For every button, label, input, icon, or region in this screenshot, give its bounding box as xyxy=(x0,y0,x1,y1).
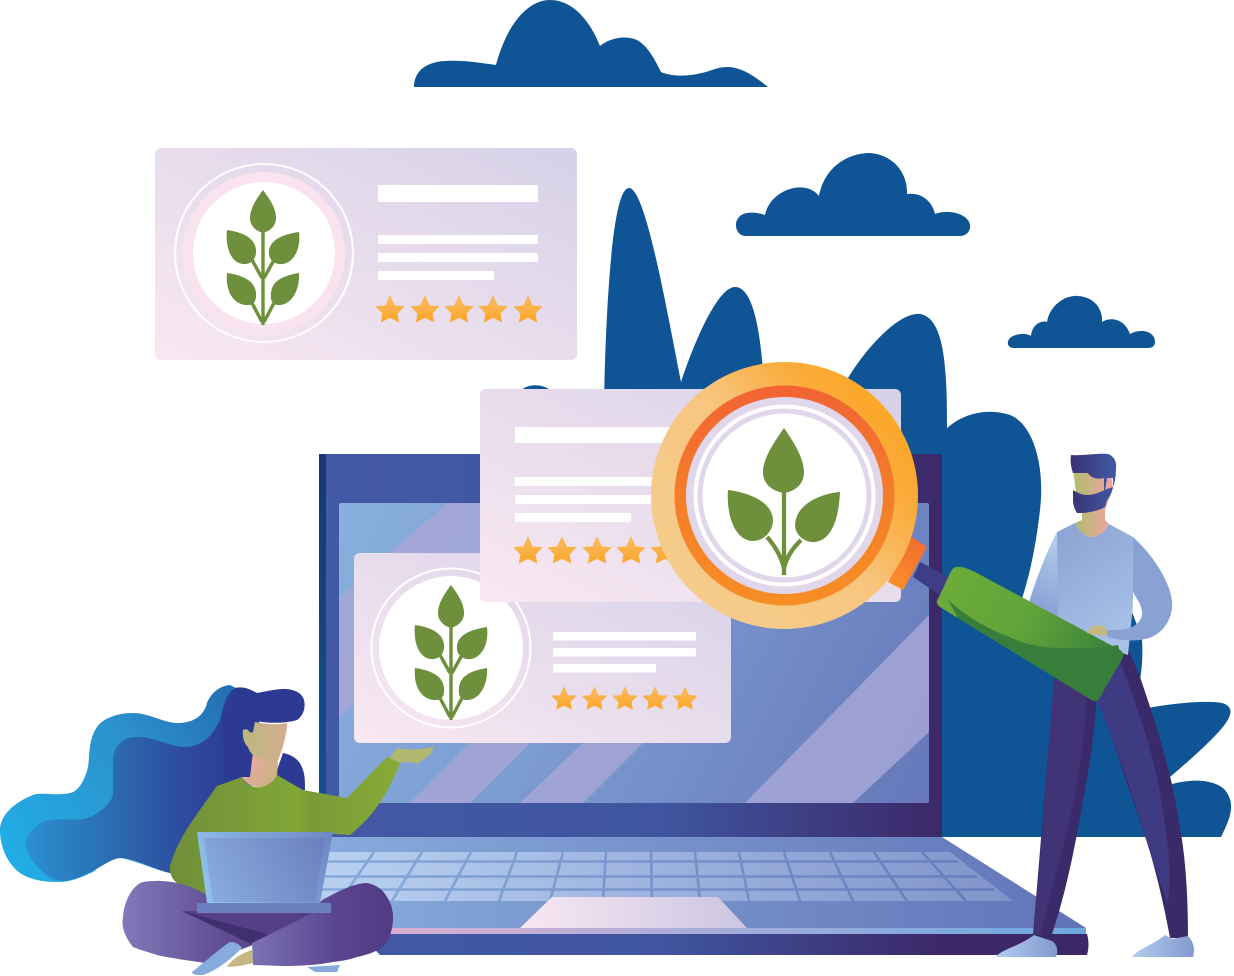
magnifying glass xyxy=(651,362,962,629)
man: hand xyxy=(1087,625,1108,635)
handle connector xyxy=(913,562,962,604)
laptop deck xyxy=(300,837,1086,928)
laptop front edge xyxy=(360,934,1088,955)
woman: hair behind neck xyxy=(270,753,305,790)
man: left sleeve xyxy=(1029,532,1062,625)
woman xyxy=(0,685,433,975)
keyboard xyxy=(290,852,1013,901)
woman: hand xyxy=(390,747,433,764)
man: torso xyxy=(1057,523,1133,655)
man: handle xyxy=(937,567,1123,701)
icon: plant badge xyxy=(175,164,353,342)
woman: left leg xyxy=(122,881,320,963)
text lines xyxy=(515,427,675,522)
panel: review card centre xyxy=(480,389,901,602)
panel: review card front xyxy=(354,553,731,743)
text lines xyxy=(378,185,538,280)
woman: face xyxy=(243,722,287,763)
star rating xyxy=(514,537,679,563)
touchpad xyxy=(520,897,747,928)
man: left leg xyxy=(1033,670,1097,940)
man: head xyxy=(1071,454,1116,513)
laptop front strip xyxy=(370,928,1086,934)
cloud: small xyxy=(1008,296,1155,348)
woman: right leg xyxy=(252,883,393,966)
laptop xyxy=(290,454,1088,955)
man: right arm xyxy=(1107,537,1172,640)
woman: shoes and ankle xyxy=(192,942,340,975)
woman: small laptop xyxy=(197,832,333,913)
woman: neck xyxy=(242,752,278,787)
lens xyxy=(651,362,918,629)
star rating xyxy=(376,296,542,322)
handle collar xyxy=(888,537,927,590)
icon: magnified plant xyxy=(728,428,840,575)
woman: hair back xyxy=(0,685,260,882)
man: neck xyxy=(1075,505,1109,537)
cloud: top xyxy=(414,0,768,87)
cloud: middle xyxy=(736,153,970,236)
woman: sweater xyxy=(170,757,400,895)
woman: leg shadow xyxy=(182,911,313,945)
background foliage xyxy=(520,188,1231,837)
star rating xyxy=(552,687,697,709)
laptop screen xyxy=(339,503,929,803)
woman: hair mid xyxy=(26,687,262,881)
text lines xyxy=(553,632,696,672)
panel: review card top-left xyxy=(155,148,577,360)
laptop screen bezel xyxy=(319,454,942,838)
icon: plant badge xyxy=(372,568,530,728)
man: shoes xyxy=(996,935,1194,957)
man xyxy=(937,454,1194,957)
woman: hair top xyxy=(222,689,305,780)
man: right leg xyxy=(1097,648,1188,938)
